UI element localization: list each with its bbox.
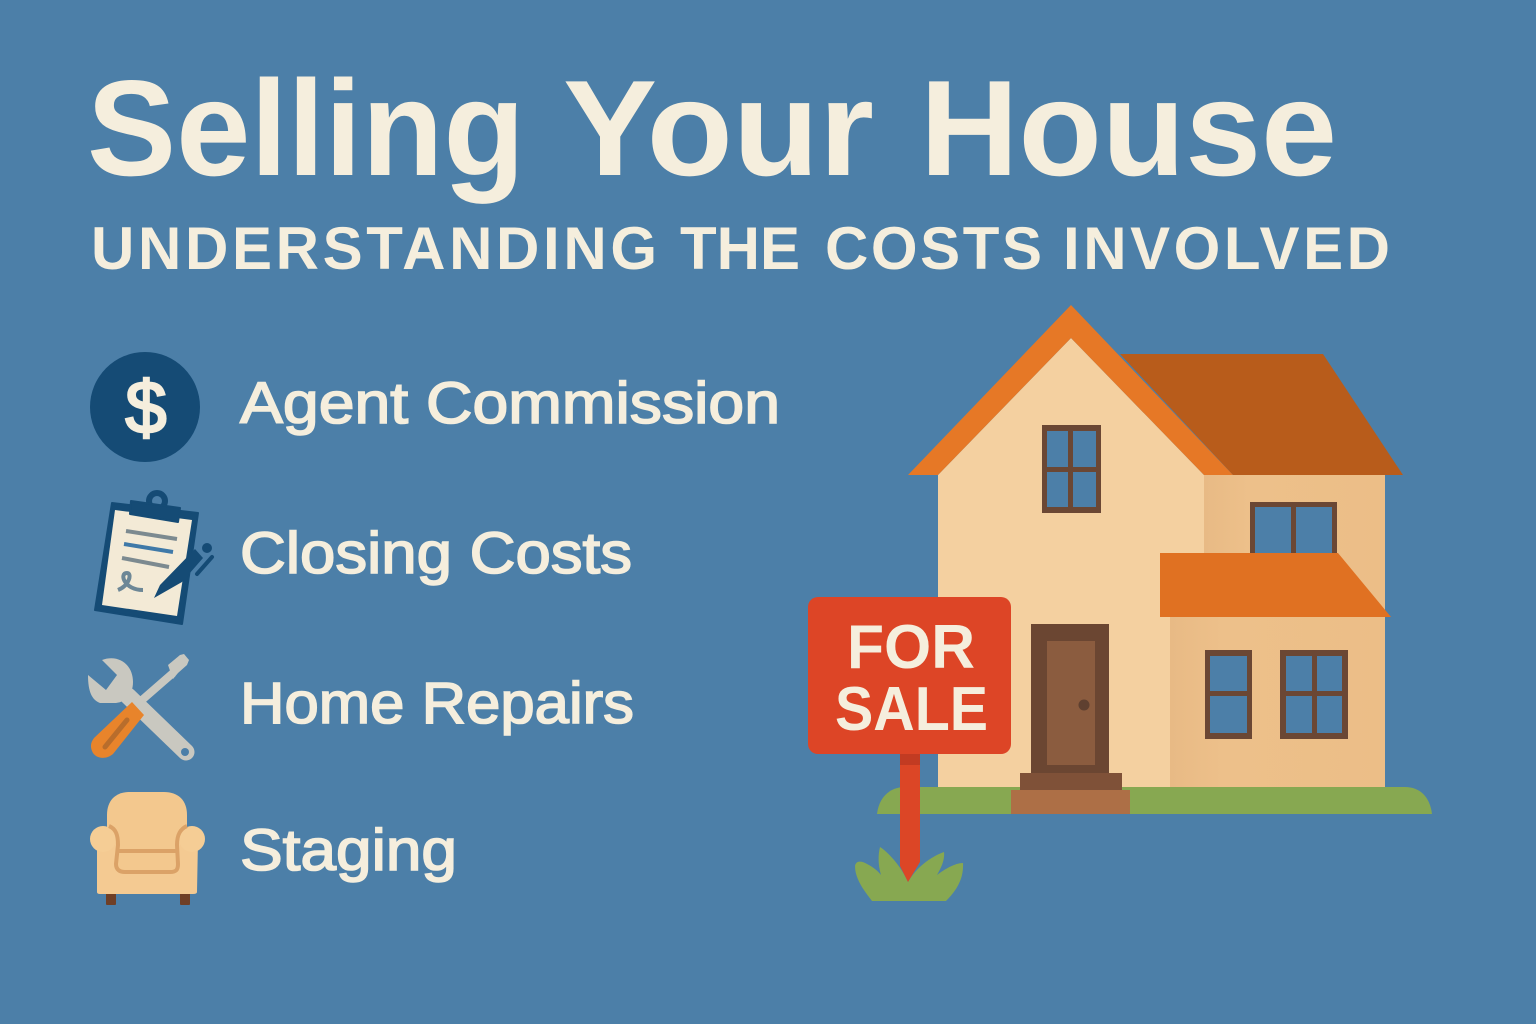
- front gable roof: [908, 305, 1233, 475]
- label: agent commission: Agent Commission: [240, 371, 780, 436]
- house right wall: [1204, 475, 1385, 617]
- subtitle: COSTS: [825, 215, 1042, 282]
- icon: clipboard and pen: [95, 493, 212, 624]
- upper right window: [1250, 502, 1337, 554]
- sign board: [808, 597, 1011, 754]
- label: home repairs: Home Repairs: [240, 671, 634, 736]
- title: [87, 52, 1337, 204]
- awning roof: [1160, 553, 1391, 617]
- subtitle: UNDERSTANDING: [91, 215, 657, 282]
- lower window right: [1280, 650, 1348, 739]
- lower window left: [1205, 650, 1252, 739]
- icon: dollar coin: $: [125, 366, 167, 449]
- subtitle: INVOLVED: [1063, 215, 1390, 282]
- sign text: FOR: [847, 613, 975, 682]
- attic window: [1042, 425, 1101, 513]
- title: House: [920, 52, 1337, 204]
- title: Selling: [87, 52, 525, 204]
- subtitle: [91, 215, 1390, 282]
- illustration: house: [877, 305, 1432, 814]
- title: Your: [563, 52, 874, 204]
- lawn: [877, 787, 1432, 814]
- door steps: [1011, 773, 1130, 814]
- for sale sign: SALE: [835, 675, 988, 744]
- sign post: [900, 754, 920, 882]
- label: staging: Staging: [240, 818, 457, 883]
- for sale sign: [808, 597, 1011, 901]
- back roof: [1120, 354, 1403, 475]
- subtitle: THE: [680, 215, 800, 282]
- icon: dollar coin: [90, 352, 200, 462]
- label: closing costs: Closing Costs: [240, 521, 632, 586]
- grass tuft: [855, 847, 963, 901]
- icon: wrench and screwdriver: [88, 654, 189, 758]
- icon: armchair: [90, 792, 205, 905]
- house left wall: [938, 338, 1204, 787]
- door: [1031, 624, 1109, 774]
